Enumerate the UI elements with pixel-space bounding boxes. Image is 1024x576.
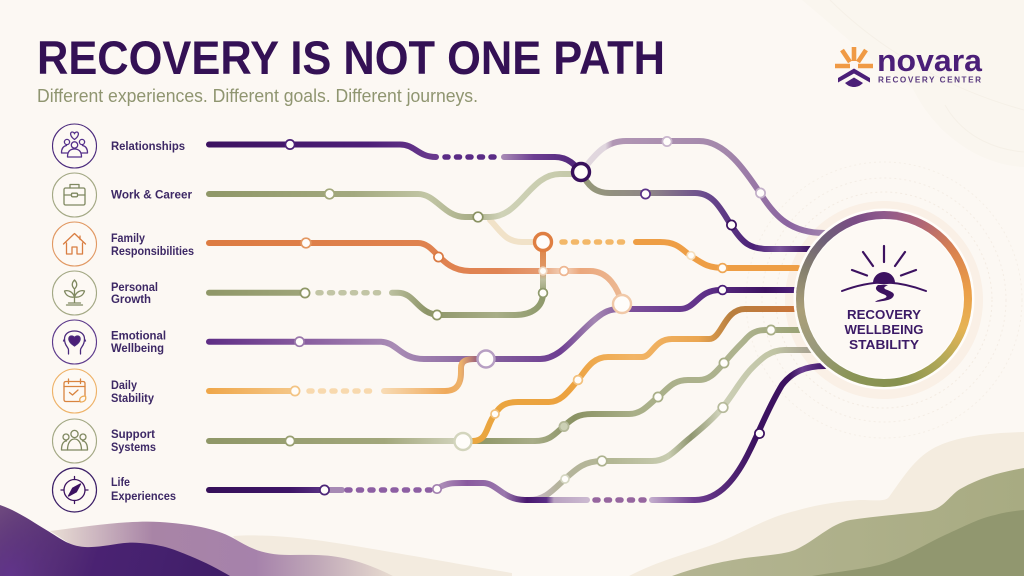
pathway: daily stability branch [473,309,800,441]
subtitle: Different experiences. Different goals. Different journeys. [37,86,478,106]
row: support systems [52,419,156,463]
label: personal growth: Personal [111,282,158,294]
label: daily stability [111,380,155,405]
hub text: WELLBEING [844,322,924,337]
label: support systems: Systems [111,442,156,454]
label: support systems: Support [111,429,155,441]
logo tagline: RECOVERY CENTER [878,76,981,84]
pathway: family responsibilities [209,243,622,304]
label: work and career: Work & Career [111,190,193,202]
label: life experiences [111,477,176,503]
label: family responsibilities: Responsibilities [111,246,194,258]
pathway: personal growth [209,293,543,315]
label: daily stability: Stability [111,393,155,405]
nodes [285,137,776,495]
pathway: daily stability [209,359,475,391]
icon: plant [52,271,96,315]
label: life experiences: Experiences [111,491,176,503]
logo: novara recovery center [835,43,983,87]
label: support systems [111,429,156,454]
background shape: top right wave [802,0,1024,167]
title: RECOVERY IS NOT ONE PATH [37,32,665,85]
logo wordmark: novara [877,43,983,78]
icon: briefcase [52,173,96,217]
label: life experiences: Life [111,477,130,489]
pathway: work and career [209,174,578,242]
pathway: orange continuation [562,242,798,268]
icon: sunrise and path [842,246,926,302]
pathway: support systems to hub [209,330,805,441]
icon: relationships [52,124,96,168]
background hills: bottom left [0,505,512,576]
hub text [844,307,924,352]
row: relationships [52,124,185,168]
icon: compass [52,468,96,512]
label: emotional wellbeing: Wellbeing [111,343,164,355]
hub halo [746,162,1022,438]
icon: support group [52,419,96,463]
pathway: life experiences [209,366,825,500]
row: emotional wellbeing [52,320,166,364]
connector: orange vertical [540,241,546,293]
junction nodes [454,164,631,450]
icon: house [52,222,96,266]
hub text: RECOVERY [847,307,921,322]
row: work and career [52,173,193,217]
row: personal growth [52,271,158,315]
row: family responsibilities [52,222,194,266]
hub: recovery wellbeing stability [796,211,972,387]
icon: calendar [52,369,96,413]
row: daily stability [52,369,155,413]
label: family responsibilities [111,233,194,258]
hub text: STABILITY [849,337,919,352]
label: relationships: Relationships [111,141,185,153]
label: emotional wellbeing: Emotional [111,330,166,342]
pathway: relationships [209,141,825,249]
label: personal growth: Growth [111,294,151,306]
logo icon: sun and chevrons [835,47,873,87]
label: family responsibilities: Family [111,233,146,245]
pathway: emotional wellbeing [209,290,800,359]
label: personal growth [111,282,158,306]
pathway: life experiences branch [529,350,812,500]
label: daily stability: Daily [111,380,138,392]
label: emotional wellbeing [111,330,166,355]
background hills: bottom right [629,432,1024,576]
icon: head with heart [52,320,96,364]
row: life experiences [52,468,176,512]
